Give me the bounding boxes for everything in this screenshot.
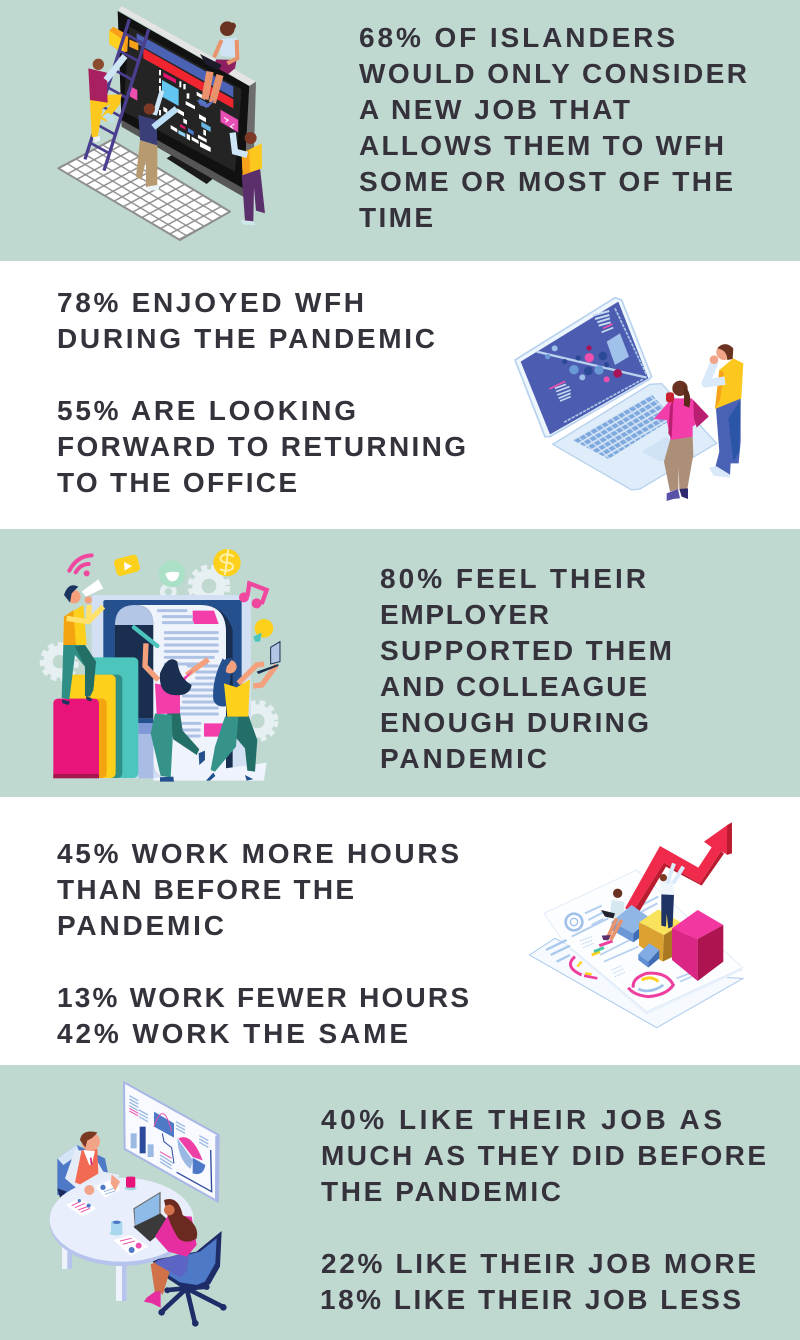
text: employer support: EMPLOYER [380, 599, 549, 630]
illustration: meeting at a round table with dashboard [50, 1082, 227, 1327]
illustration: rising arrow over reports and blocks [529, 822, 743, 1028]
text: enjoyed working from home: DURING THE PANDEMIC [57, 323, 435, 354]
illustration: two people at a giant laptop [515, 298, 743, 501]
text: working hours: 42% WORK THE SAME [57, 1018, 408, 1049]
text: job satisfaction: 40% LIKE THEIR JOB AS [321, 1104, 722, 1135]
text: enjoyed working from home: TO THE OFFICE [57, 467, 297, 498]
illustration: team around a document and books [42, 549, 280, 782]
text: enjoyed working from home: FORWARD TO RETURNING [57, 431, 466, 462]
text: job consideration: 68% OF ISLANDERS [359, 22, 675, 53]
text: job consideration: TIME [359, 202, 433, 233]
text: employer support: ENOUGH DURING [380, 707, 649, 738]
text: job satisfaction [320, 1104, 766, 1315]
text: employer support [380, 563, 672, 774]
text: working hours [57, 838, 469, 1049]
text: enjoyed working from home [57, 287, 466, 498]
illustration: team building a website on a giant monitor [58, 6, 265, 240]
text: job satisfaction: 18% LIKE THEIR JOB LESS [320, 1284, 741, 1315]
text: job consideration: SOME OR MOST OF THE [359, 166, 733, 197]
text: working hours: 13% WORK FEWER HOURS [57, 982, 469, 1013]
panel: job satisfaction [0, 1065, 800, 1340]
text: working hours: PANDEMIC [57, 910, 224, 941]
text: employer support: PANDEMIC [380, 743, 547, 774]
text: enjoyed working from home: 55% ARE LOOKING [57, 395, 356, 426]
panel: employer support [0, 529, 800, 797]
text: job consideration: ALLOWS THEM TO WFH [359, 130, 724, 161]
text: enjoyed working from home: 78% ENJOYED WFH [57, 287, 364, 318]
text: working hours: THAN BEFORE THE [57, 874, 354, 905]
text: employer support: 80% FEEL THEIR [380, 563, 646, 594]
panel: working hours [0, 797, 800, 1065]
text: job satisfaction: THE PANDEMIC [321, 1176, 561, 1207]
text: job consideration: WOULD ONLY CONSIDER [359, 58, 747, 89]
text: job consideration: A NEW JOB THAT [359, 94, 630, 125]
text: employer support: SUPPORTED THEM [380, 635, 672, 666]
panel: enjoyed working from home [0, 261, 800, 529]
text: working hours: 45% WORK MORE HOURS [57, 838, 459, 869]
text: job satisfaction: MUCH AS THEY DID BEFORE [321, 1140, 766, 1171]
text: job consideration [359, 22, 747, 233]
text: employer support: AND COLLEAGUE [380, 671, 647, 702]
panel: job consideration [0, 0, 800, 261]
text: job satisfaction: 22% LIKE THEIR JOB MORE [321, 1248, 756, 1279]
